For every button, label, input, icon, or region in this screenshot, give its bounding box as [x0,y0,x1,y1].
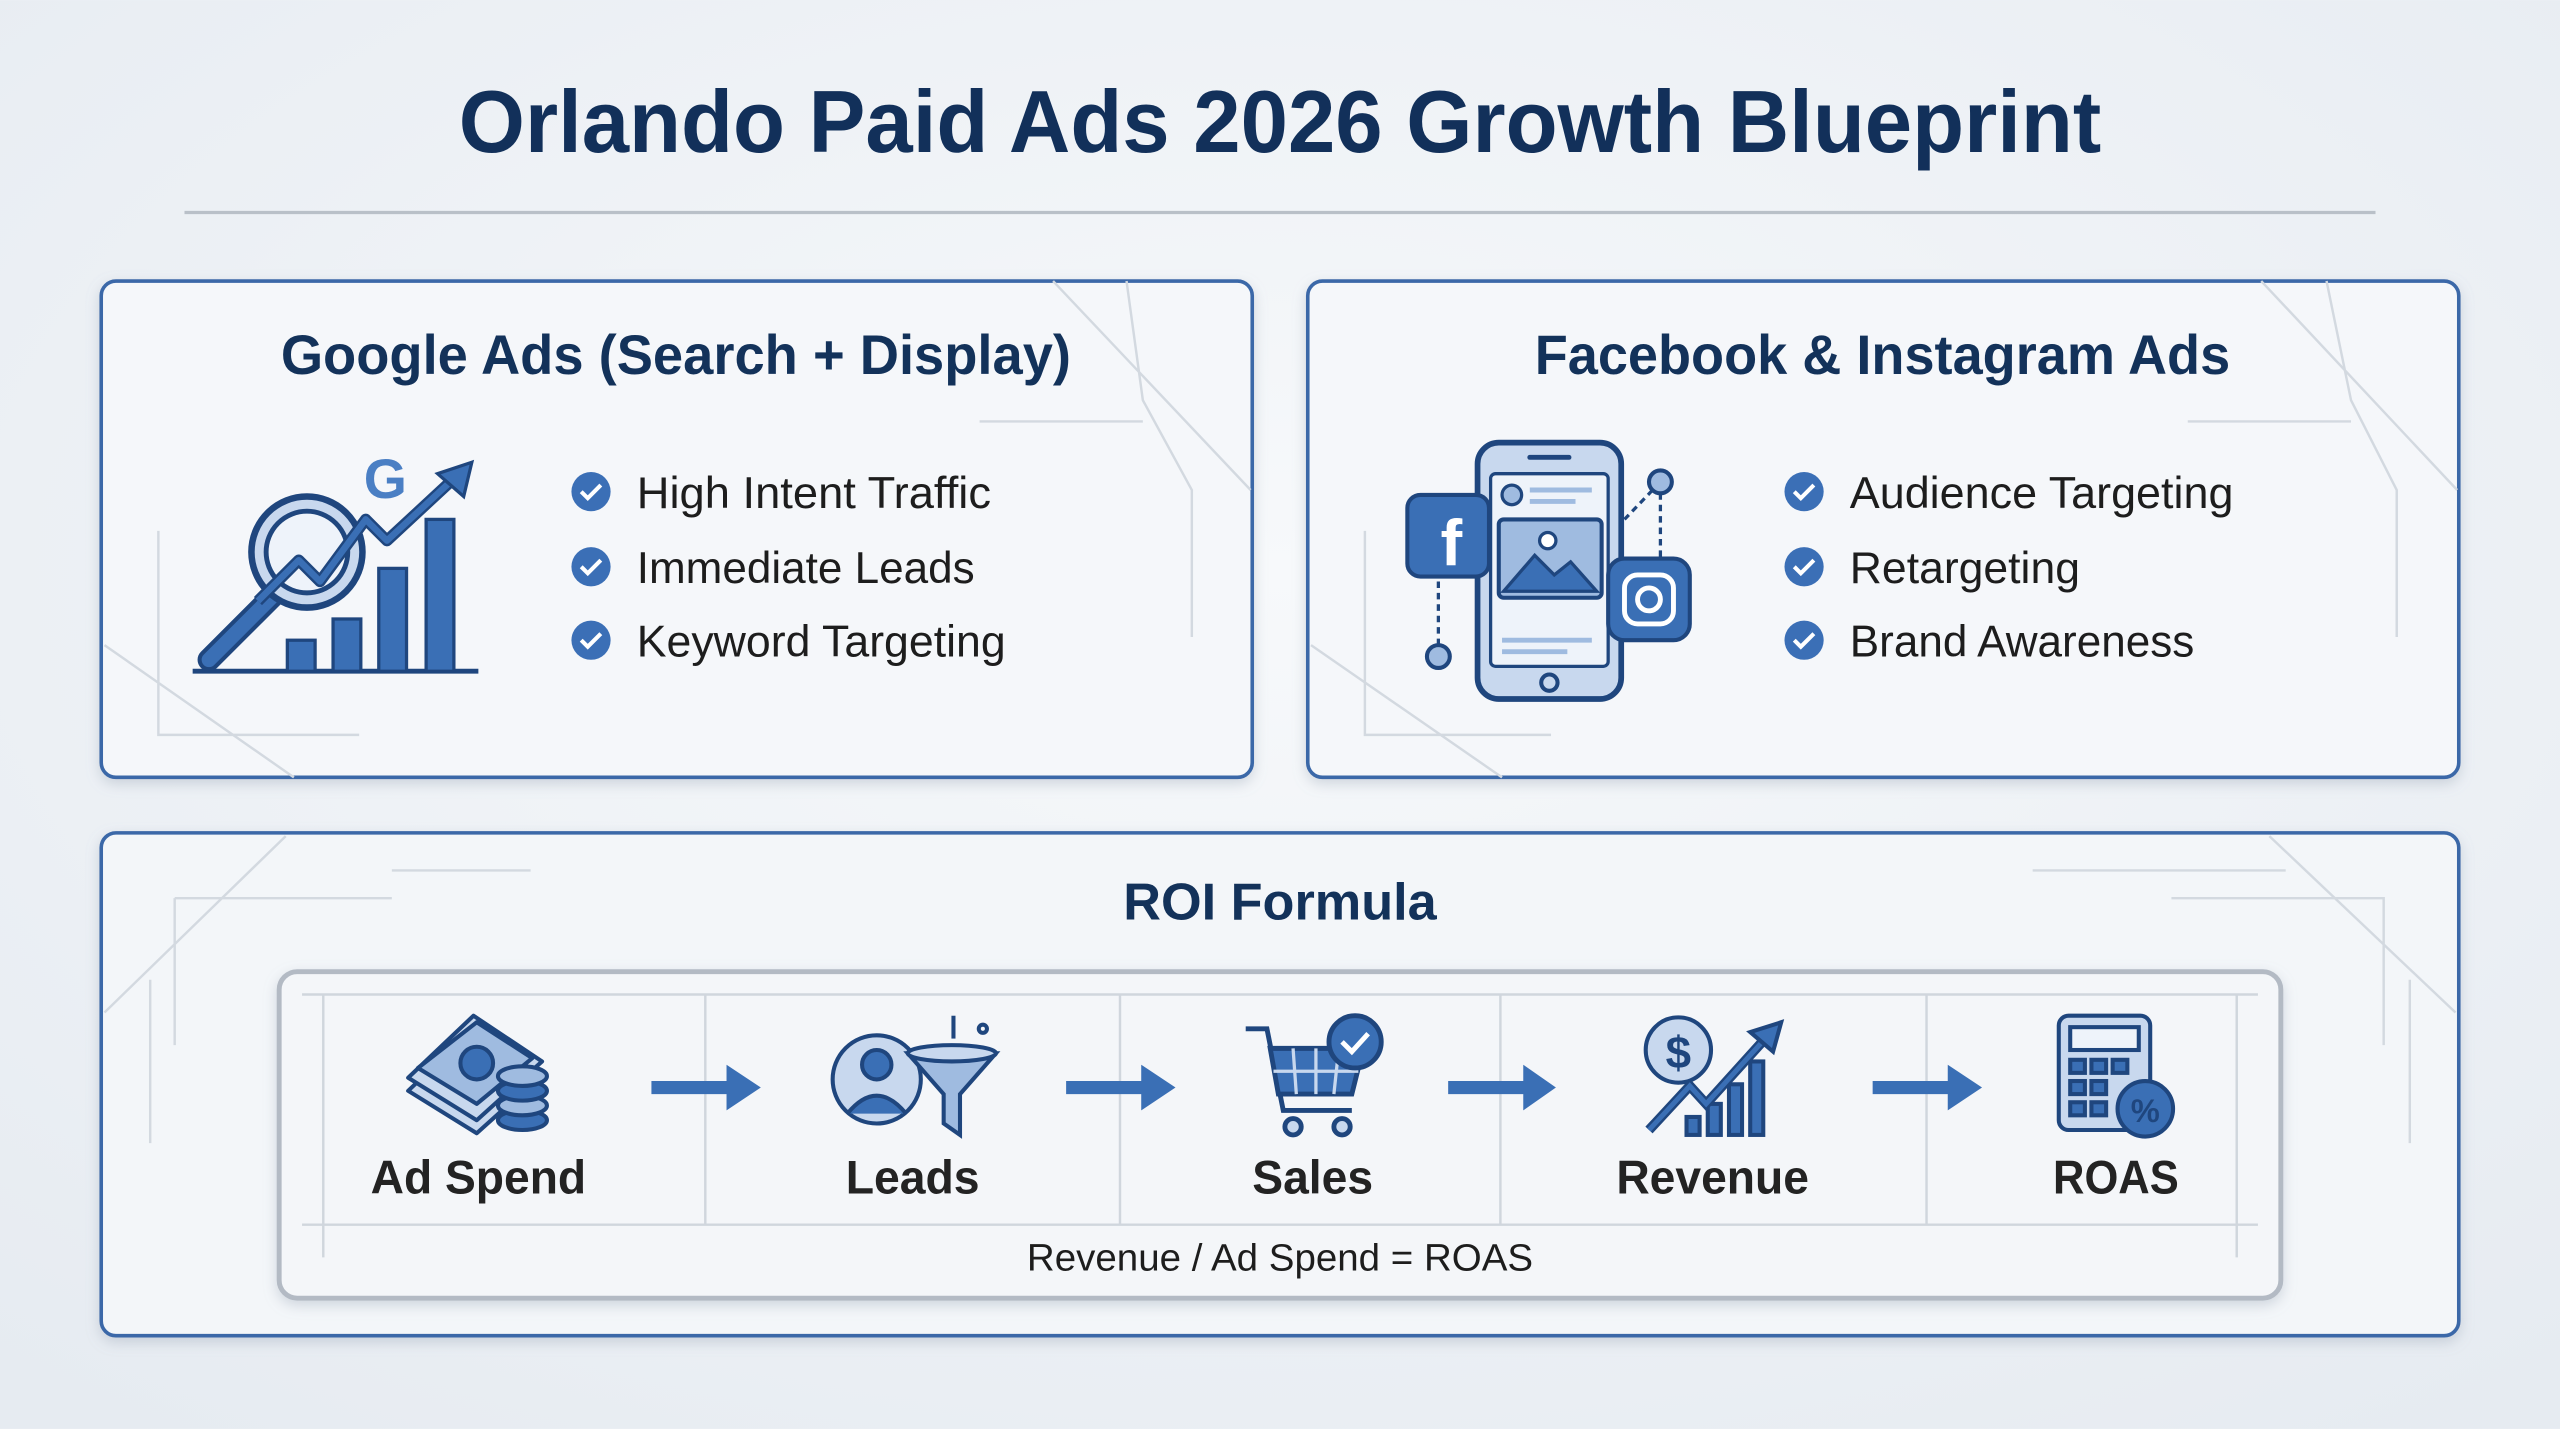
bullet list: social [1784,469,2233,667]
icon: ad spend money [408,1016,547,1133]
icon: leads funnel [833,1016,996,1135]
panel: ROI formula [101,833,2459,1336]
step labels: Ad Spend [371,1152,586,1205]
formula box [279,972,2281,1298]
bullet list: google: Keyword Targeting [637,618,1006,667]
icon: phone with social logos: f [1441,506,1463,579]
arrow [1066,1065,1176,1110]
icon: magnifier with growth chart [193,448,478,671]
bullet list: google: Immediate Leads [637,544,975,593]
heading: facebook instagram: Facebook & Instagram Ads [1535,324,2230,386]
panel: facebook instagram [1308,281,2459,777]
bullet list: google [571,469,1006,667]
bullet list: social: Retargeting [1850,544,2080,593]
bullet list: google: High Intent Traffic [637,469,991,518]
step labels: Revenue [1616,1152,1809,1205]
icon: revenue growth [1646,1017,1781,1135]
bullet list: social: Brand Awareness [1850,618,2194,667]
icon: sales cart [1246,1016,1381,1135]
icon: phone with social logos [1407,443,1690,699]
icon: revenue growth: $ [1666,1027,1691,1078]
panel: google ads [101,281,1252,777]
arrow [1448,1065,1556,1110]
title: Orlando Paid Ads 2026 Growth Blueprint [459,72,2101,171]
step labels: ROAS [2053,1152,2179,1205]
arrow [651,1065,761,1110]
arrow [1873,1065,1982,1110]
heading: google ads: Google Ads (Search + Display) [281,324,1071,386]
step labels: Leads [846,1152,980,1205]
bullet list: social: Audience Targeting [1850,469,2233,518]
step labels: Sales [1252,1152,1373,1205]
icon: magnifier with growth chart: G [364,448,407,510]
heading: ROI formula: ROI Formula [1123,873,1438,931]
formula text: Revenue / Ad Spend = ROAS [1027,1236,1533,1278]
step labels [371,1152,2179,1205]
icon: ROAS calculator: % [2131,1092,2160,1129]
icon: ROAS calculator [2059,1016,2173,1137]
